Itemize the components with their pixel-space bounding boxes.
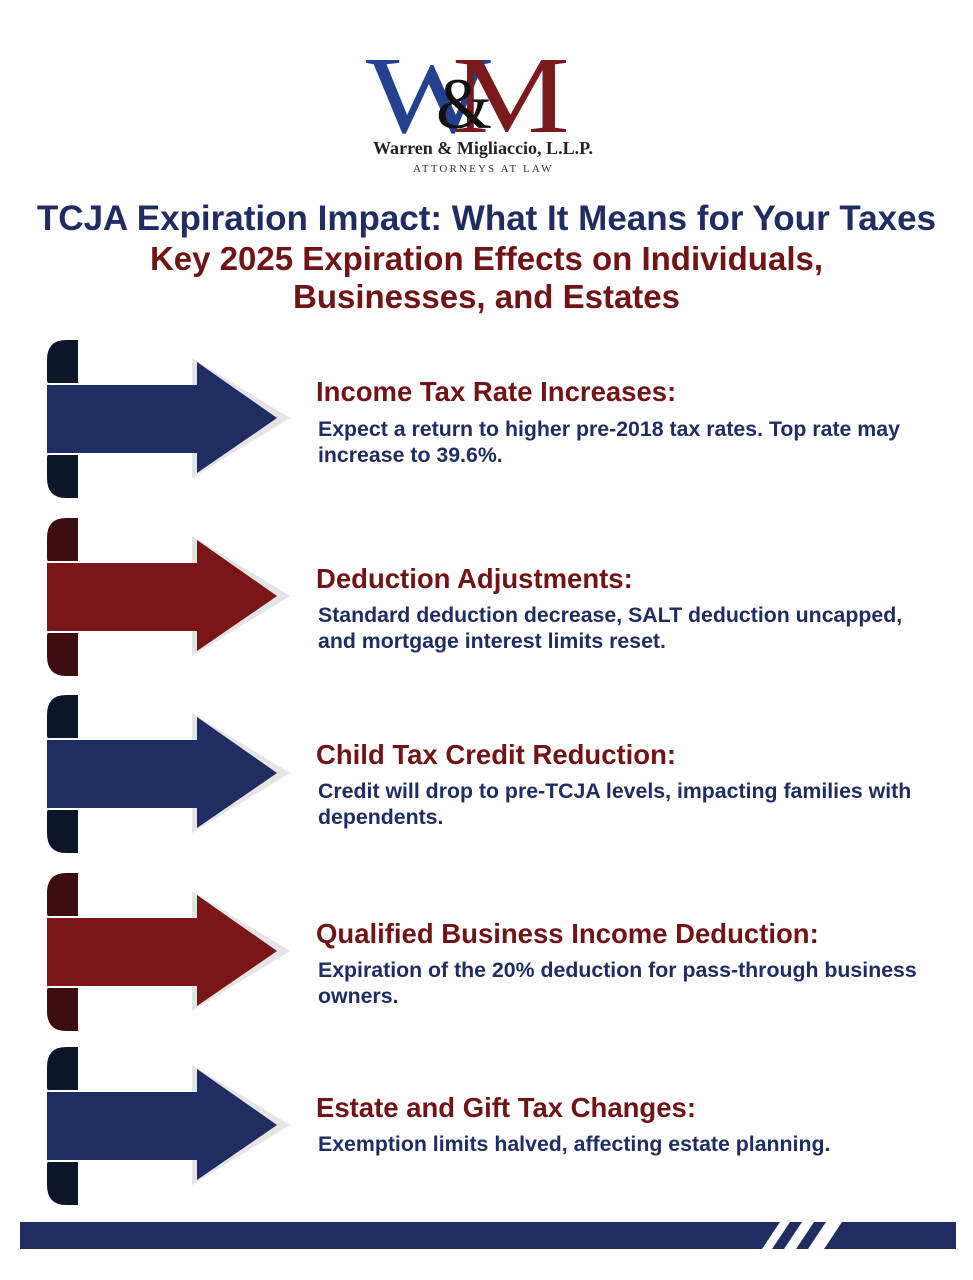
text 1: Expect a return to higher pre-2018 tax rates. Top rate may increase to 39.6%. [318, 417, 900, 467]
text 2: Standard deduction decrease, SALT deduction uncapped, and mortgage interest limits reset. [318, 603, 902, 653]
subtitle [150, 240, 823, 315]
arrow icons [47, 340, 290, 1205]
heading 5: Estate and Gift Tax Changes: [316, 1092, 696, 1123]
heading 1: Income Tax Rate Increases: [316, 376, 676, 407]
title: TCJA Expiration Impact: What It Means for Your Taxes [37, 199, 936, 238]
arrow 4 [47, 873, 290, 1031]
logo W: W [366, 36, 491, 156]
logo [366, 36, 593, 175]
heading 3: Child Tax Credit Reduction: [316, 739, 676, 770]
text 5: Exemption limits halved, affecting estate planning. [318, 1132, 830, 1156]
heading 4: Qualified Business Income Deduction: [316, 918, 819, 949]
subtitle: Key 2025 Expiration Effects on Individuals, [150, 240, 823, 277]
text 3: Credit will drop to pre-TCJA levels, impacting families with dependents. [318, 779, 911, 829]
arrow 5 [47, 1047, 290, 1205]
arrow 2 [47, 518, 290, 676]
logo M: M [452, 36, 570, 156]
footer bar [20, 1222, 956, 1249]
logo tagline: ATTORNEYS AT LAW [413, 163, 553, 175]
logo ampersand: & [436, 64, 492, 144]
subtitle: Businesses, and Estates [293, 278, 680, 315]
arrow 1 [47, 340, 290, 498]
heading 2: Deduction Adjustments: [316, 563, 633, 594]
logo firm name: Warren & Migliaccio, L.L.P. [373, 138, 593, 158]
text 4: Expiration of the 20% deduction for pass-through business owners. [318, 958, 917, 1008]
arrow 3 [47, 695, 290, 853]
